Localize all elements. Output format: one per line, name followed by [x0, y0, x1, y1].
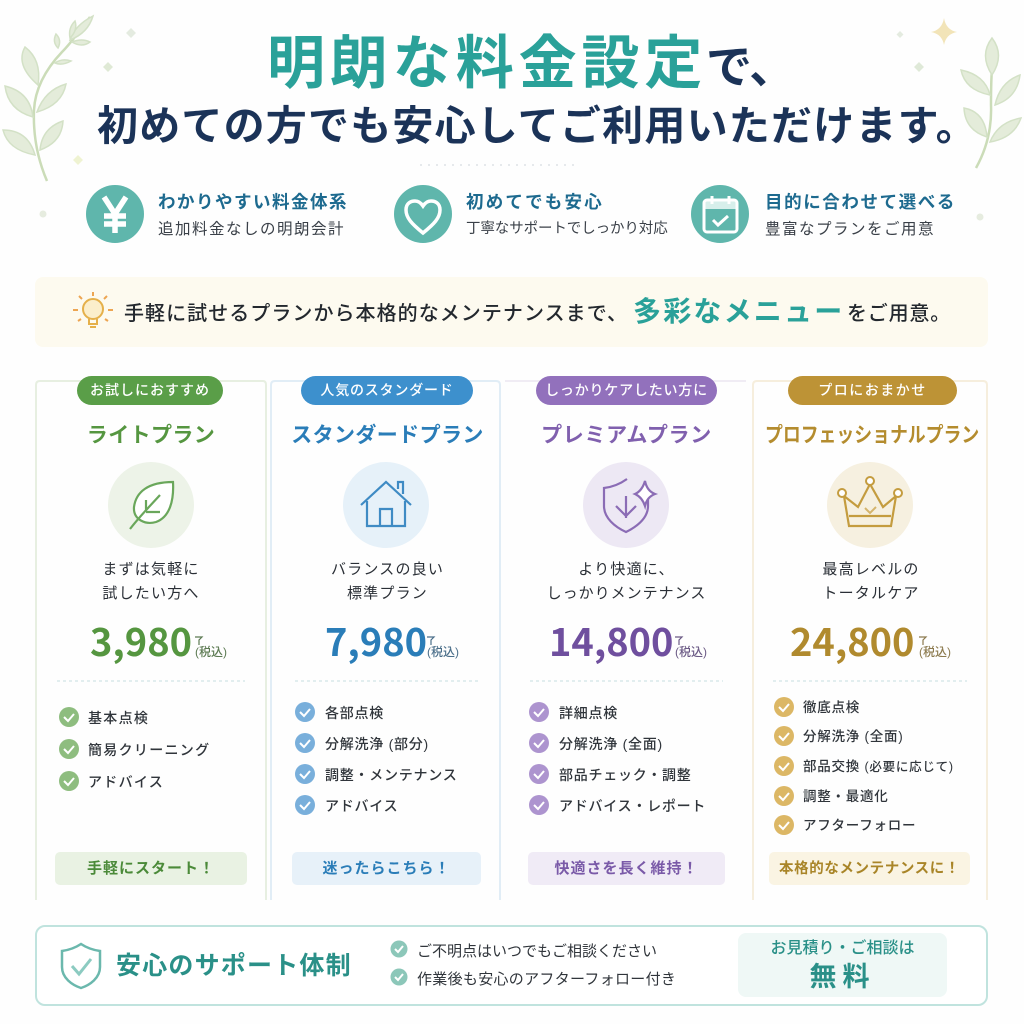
divider	[530, 680, 723, 682]
divider	[295, 680, 478, 682]
panel: professional plan	[752, 376, 988, 900]
icon: house	[343, 462, 429, 548]
tax: (税込)	[675, 645, 707, 659]
item: 調整・メンテナンス	[325, 767, 457, 783]
free estimate box	[738, 933, 947, 997]
badge	[77, 376, 223, 405]
decoration: right leaf branch	[960, 37, 1022, 168]
price: 24,800	[790, 612, 914, 667]
icon: shield check	[60, 942, 102, 990]
title	[97, 31, 978, 149]
banner	[35, 277, 988, 347]
call to action: 手軽にスタート！	[87, 860, 215, 877]
feature heading: わかりやすい料金体系	[158, 192, 348, 212]
item: 部品交換 (必要に応じて)	[803, 759, 954, 774]
feature: pricing clarity	[86, 185, 348, 243]
item: アフターフォロー	[803, 818, 916, 833]
plan name: スタンダードプラン	[291, 424, 484, 447]
decoration: right sparkles	[896, 18, 984, 220]
badge: お試しにおすすめ	[90, 382, 210, 398]
call to action	[769, 852, 970, 885]
feature text: 豊富なプランをご用意	[765, 221, 935, 238]
feature: choose by purpose	[691, 185, 956, 243]
point: ご不明点はいつでもご相談ください	[417, 943, 657, 960]
icon: shield	[583, 462, 669, 548]
banner text end: をご用意。	[847, 303, 951, 325]
point: 作業後も安心のアフターフォロー付き	[417, 971, 676, 988]
badge	[788, 376, 957, 405]
plan name: ライトプラン	[87, 424, 215, 447]
description line 2: 試したい方へ	[102, 585, 200, 602]
check	[774, 697, 794, 836]
divider	[57, 680, 245, 682]
tax mark	[675, 636, 684, 645]
plan name: プレミアムプラン	[541, 424, 712, 447]
check	[295, 702, 315, 815]
item: アドバイス・レポート	[559, 798, 706, 814]
badge	[301, 376, 473, 405]
call to action: 快適さを長く維持！	[554, 860, 698, 877]
check	[390, 940, 408, 986]
call to action	[528, 852, 725, 885]
description line 2: トータルケア	[822, 585, 920, 602]
feature heading: 初めてでも安心	[466, 192, 604, 212]
panel: light plan	[35, 376, 267, 900]
item: 分解洗浄 (全面)	[559, 736, 663, 752]
item: アドバイス	[88, 774, 164, 790]
banner highlight: 多彩なメニュー	[633, 296, 844, 327]
description: まずは気軽に	[102, 561, 200, 578]
panel: support	[35, 925, 988, 1006]
item: 基本点検	[88, 710, 149, 726]
description line 2: しっかりメンテナンス	[547, 585, 706, 602]
call to action: 本格的なメンテナンスに！	[779, 861, 960, 877]
title line 1 accent: 明朗な料金設定	[267, 31, 707, 96]
tax mark	[919, 636, 928, 645]
feature text: 丁寧なサポートでしっかり対応	[466, 221, 668, 237]
tax mark	[427, 636, 436, 645]
item: 徹底点検	[803, 700, 860, 715]
feature list	[59, 707, 210, 791]
badge: しっかりケアしたい方に	[545, 382, 708, 398]
feature list	[529, 702, 706, 815]
icon: heart	[394, 185, 452, 243]
item: 調整・最適化	[803, 789, 888, 804]
description: より快適に、	[578, 561, 675, 578]
card outline	[752, 380, 988, 900]
tax: (税込)	[195, 645, 227, 659]
support heading: 安心のサポート体制	[116, 952, 352, 980]
panel: premium plan	[505, 376, 746, 885]
divider	[773, 680, 967, 682]
item: 部品チェック・調整	[559, 767, 691, 783]
badge: 人気のスタンダード	[320, 382, 454, 398]
price: 7,980	[325, 612, 427, 667]
feature: peace of mind	[394, 185, 668, 243]
item: 各部点検	[325, 705, 384, 721]
check	[59, 707, 79, 791]
icon: crown	[827, 462, 913, 548]
call to action	[55, 852, 247, 885]
tax: (税込)	[919, 645, 951, 659]
item: 分解洗浄 (部分)	[325, 736, 429, 752]
description line 2: 標準プラン	[347, 585, 428, 602]
item: 簡易クリーニング	[88, 742, 210, 758]
card outline	[505, 380, 746, 382]
call to action	[292, 852, 481, 885]
description: 最高レベルの	[822, 561, 920, 578]
check	[529, 702, 549, 815]
card outline	[35, 380, 267, 900]
item: 詳細点検	[559, 705, 618, 721]
feature text: 追加料金なしの明朗会計	[158, 221, 345, 238]
estimate label: お見積り・ご相談は	[770, 940, 914, 957]
icon: light bulb	[73, 292, 113, 328]
card outline	[270, 380, 501, 900]
price: 3,980	[90, 612, 192, 667]
banner text start: 手軽に試せるプランから本格的なメンテナンスまで、	[124, 303, 628, 325]
title line 1 end: で、	[706, 41, 794, 93]
icon: calendar	[691, 185, 749, 243]
badge	[536, 376, 717, 405]
decoration: dotted rule	[420, 164, 574, 166]
icon: leaf	[108, 462, 194, 548]
badge: プロにおまかせ	[818, 382, 927, 398]
icon: yen	[86, 185, 144, 243]
title line 2: 初めての方でも安心してご利用いただけます。	[97, 103, 978, 149]
decoration: left leaf branch	[2, 14, 94, 182]
free: 無料	[810, 962, 876, 992]
price: 14,800	[549, 612, 673, 667]
tax mark	[195, 636, 204, 645]
item: アドバイス	[325, 798, 398, 814]
item: 分解洗浄 (全面)	[803, 729, 904, 744]
feature list	[774, 697, 954, 835]
support points	[390, 940, 690, 990]
feature list	[295, 702, 457, 815]
call to action: 迷ったらこちら！	[322, 860, 450, 877]
feature heading: 目的に合わせて選べる	[765, 192, 956, 212]
description: バランスの良い	[331, 561, 444, 578]
panel: standard plan	[270, 376, 501, 900]
tax: (税込)	[427, 645, 459, 659]
decoration: left sparkles	[40, 28, 136, 218]
plan name: プロフェッショナルプラン	[765, 424, 979, 447]
